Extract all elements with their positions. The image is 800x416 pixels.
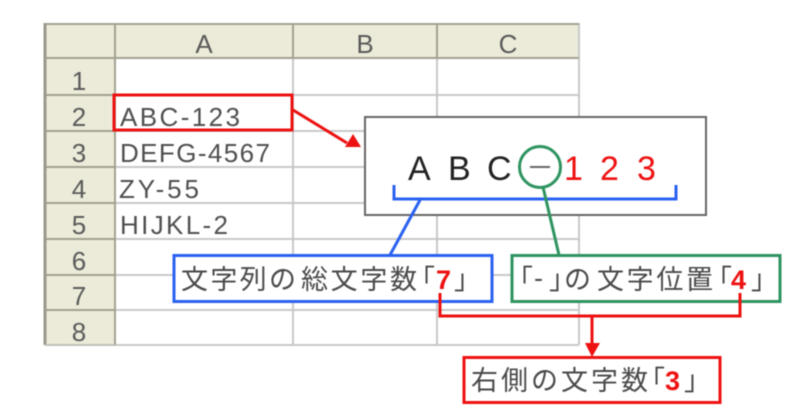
row numbers: 6 (72, 246, 86, 276)
callout: total characters: 」 (454, 265, 481, 295)
callout: hyphen position: 「 (705, 265, 732, 295)
callout: right side characters: 「 (638, 366, 665, 396)
column headers (195, 29, 517, 59)
red characters (564, 150, 656, 188)
callout: hyphen position: 4 (731, 265, 746, 295)
callout: hyphen position: 」 (549, 265, 576, 295)
arrow: cell to detail (293, 110, 361, 147)
red characters: 2 (600, 150, 619, 188)
callout: right side characters: 」 (684, 366, 711, 396)
black characters (408, 150, 512, 188)
callout: right side characters (464, 358, 720, 402)
row numbers: 1 (72, 66, 86, 96)
green connector (543, 187, 559, 255)
red characters: 3 (637, 150, 656, 188)
callout: hyphen position: の (564, 265, 591, 295)
callout: right side characters: 3 (665, 366, 680, 396)
callout: hyphen position: 「 (506, 265, 533, 295)
row numbers: 2 (72, 102, 86, 132)
cell values: HIJKL-2 (120, 210, 228, 240)
spreadsheet (45, 23, 579, 347)
row numbers: 5 (72, 210, 86, 240)
highlighted cell A2 (114, 95, 292, 130)
column headers: C (499, 29, 517, 59)
callout: hyphen position (506, 256, 780, 302)
column headers: A (195, 29, 213, 59)
callout: hyphen position: 」 (751, 265, 778, 295)
cell values (119, 102, 270, 240)
dash character (530, 166, 550, 168)
callout: total characters: 「 (408, 265, 435, 295)
callout: total characters (174, 256, 492, 302)
red characters: 1 (564, 150, 583, 188)
black characters: C (487, 150, 512, 188)
black characters: B (448, 150, 471, 188)
panel: character breakdown (365, 117, 706, 215)
callout: total characters: 総文字数 (301, 265, 417, 295)
callout: hyphen position: 文字位置 (597, 265, 713, 295)
blue connector (390, 200, 420, 255)
row numbers: 4 (72, 174, 86, 204)
row numbers: 3 (72, 138, 86, 168)
cell values: ZY-55 (119, 174, 199, 204)
cell values: DEFG-4567 (120, 138, 270, 168)
green circle (520, 146, 560, 188)
callout: hyphen position: - (534, 263, 543, 293)
blue bracket (394, 185, 676, 199)
column headers: B (356, 29, 374, 59)
header row and column background (45, 23, 579, 345)
black characters: A (408, 150, 431, 188)
row numbers: 8 (72, 317, 86, 347)
callout: total characters: 7 (436, 265, 451, 295)
callout: right side characters: 右側の (471, 366, 558, 396)
bracket connector with arrow (440, 293, 740, 357)
cell values: ABC-123 (120, 102, 240, 132)
callout: total characters: 文字列の (181, 265, 296, 295)
callout: right side characters: 文字数 (561, 366, 648, 396)
row numbers (72, 66, 86, 347)
row numbers: 7 (72, 281, 86, 311)
